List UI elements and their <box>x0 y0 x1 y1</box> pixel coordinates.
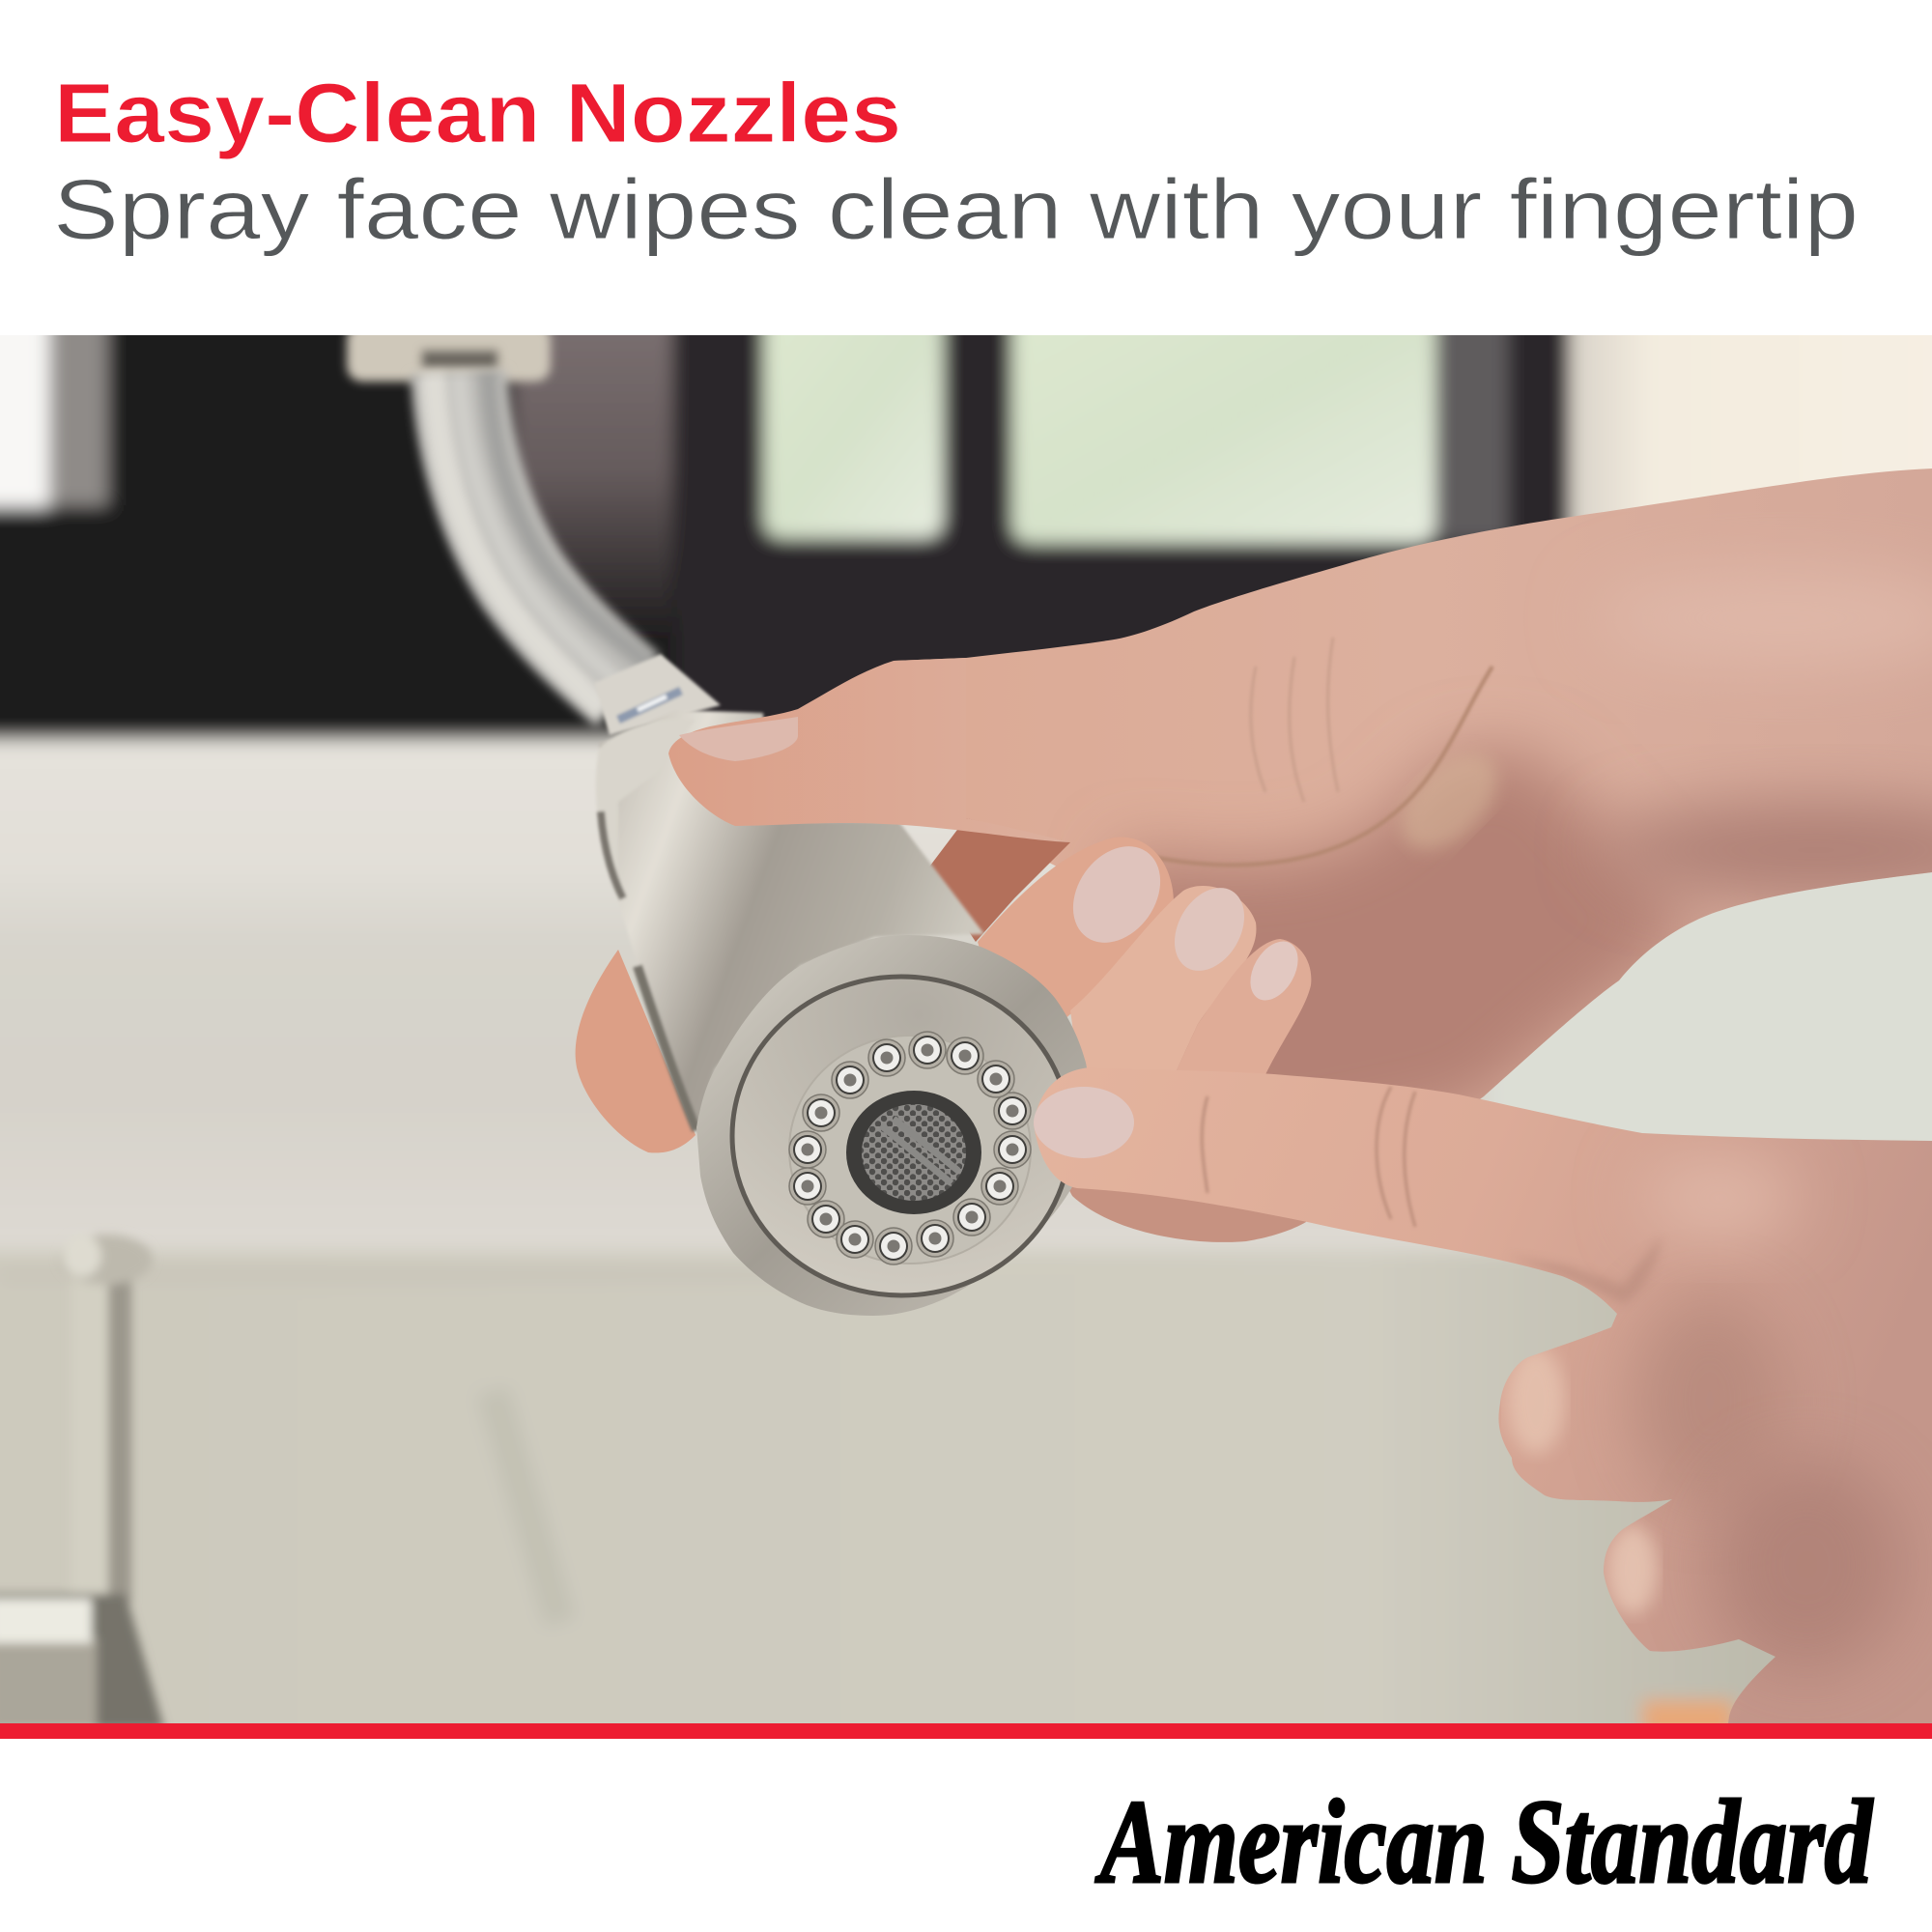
shaded finger strip <box>927 818 1070 942</box>
finger behind sprayer <box>576 950 696 1152</box>
blurred kitchen background <box>0 309 1932 1758</box>
palm and wrist shading <box>1130 574 1932 1099</box>
curled finger two <box>1070 886 1256 1070</box>
curled finger one <box>978 837 1174 1017</box>
hand behind the sprayer <box>895 469 1932 1099</box>
braided hose <box>433 372 652 710</box>
photo: hand holding sprayer <box>0 309 1932 1758</box>
curled finger three <box>1177 939 1312 1074</box>
faucet collar <box>347 324 551 382</box>
red divider bar <box>0 1723 1932 1739</box>
lower finger under pointing finger <box>1070 1186 1306 1242</box>
inner raised ring <box>789 1036 1031 1264</box>
central aerator <box>846 1091 981 1214</box>
pointing hand <box>1034 1067 1932 1724</box>
background faucet <box>0 1235 164 1729</box>
sprayer body <box>596 710 984 1130</box>
thumb <box>668 658 1070 842</box>
spray face <box>696 935 1096 1316</box>
ring of nozzles <box>789 1032 1031 1264</box>
subtitle: Spray face wipes clean with your fingertip <box>53 161 1859 257</box>
brushed highlight <box>900 978 906 1048</box>
knuckle shading <box>1507 1159 1903 1671</box>
sprayer neck connector <box>594 654 721 735</box>
title: Easy-Clean Nozzles <box>54 67 901 160</box>
fingertip nail <box>1034 1087 1134 1158</box>
finger creases <box>1202 1087 1415 1227</box>
groove and plate <box>732 977 1070 1295</box>
outer rim <box>696 935 1096 1316</box>
